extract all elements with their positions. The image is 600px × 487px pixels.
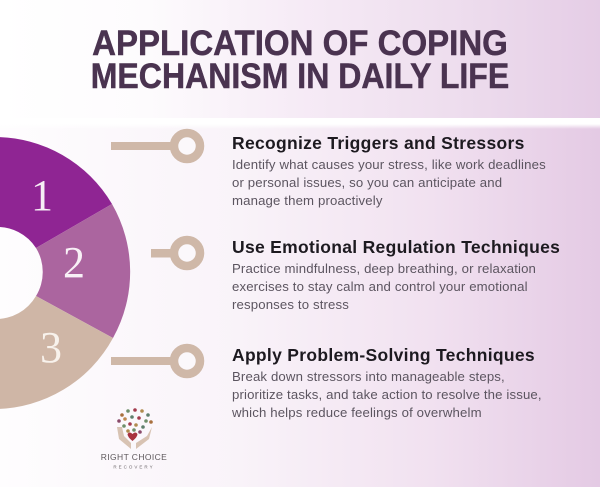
text block 2: exercises to stay calm and control your emotional xyxy=(232,279,528,294)
donut segment 2: 2 xyxy=(63,238,85,287)
logo: Right Choice Recovery xyxy=(101,408,167,470)
donut segment 1: 1 xyxy=(31,171,53,220)
title: APPLICATION OF COPING xyxy=(92,23,508,63)
donut segment 1 xyxy=(0,137,112,248)
text block 1: manage them proactively xyxy=(232,193,383,208)
text block 2 xyxy=(232,261,536,312)
donut segment 3: 3 xyxy=(40,323,62,372)
logo name: RIGHT CHOICE xyxy=(101,452,167,462)
connector 2 xyxy=(151,240,200,266)
text block 1: or personal issues, so you can anticipate and xyxy=(232,175,502,190)
icon: tree of leaves xyxy=(117,408,153,434)
heading 2: Use Emotional Regulation Techniques xyxy=(232,237,560,257)
title: MECHANISM IN DAILY LIFE xyxy=(91,56,509,96)
donut segment 3 xyxy=(0,296,113,409)
donut segment 2 xyxy=(36,204,130,338)
connector 3 xyxy=(111,348,200,374)
text block 3: which helps reduce feelings of overwhelm xyxy=(232,405,482,420)
icon: hands xyxy=(117,427,152,449)
title xyxy=(91,23,509,96)
text block 3: prioritize tasks, and take action to resolve the issue, xyxy=(232,387,542,402)
white strip under title band xyxy=(0,118,600,129)
text block 1 xyxy=(232,157,546,208)
logo subtitle: RECOVERY xyxy=(113,464,155,470)
heading 1: Recognize Triggers and Stressors xyxy=(232,133,525,153)
icon: heart xyxy=(128,432,138,441)
connector 1 xyxy=(111,133,200,159)
title band xyxy=(0,0,600,118)
text block 2: responses to stress xyxy=(232,297,349,312)
heading 3: Apply Problem-Solving Techniques xyxy=(232,345,535,365)
text block 3 xyxy=(232,369,542,420)
text block 3: Break down stressors into manageable steps, xyxy=(232,369,505,384)
text block 2: Practice mindfulness, deep breathing, or relaxation xyxy=(232,261,536,276)
text block 1: Identify what causes your stress, like work deadlines xyxy=(232,157,546,172)
